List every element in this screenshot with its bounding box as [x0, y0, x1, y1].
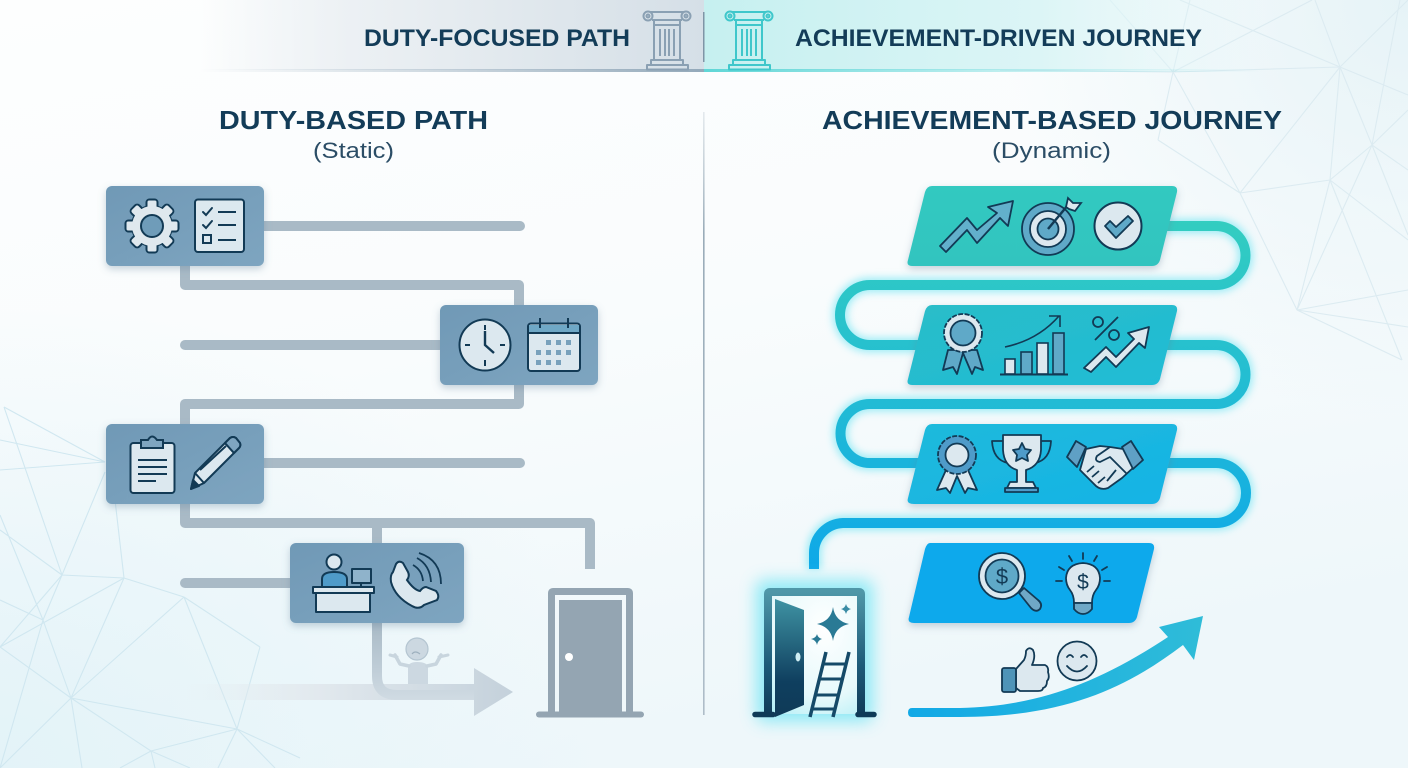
header label: achievement-driven journey: ACHIEVEMENT-DRIVEN JOURNEY	[795, 25, 1202, 52]
icon: gear	[126, 200, 178, 252]
icon: target	[1022, 198, 1081, 255]
icon: magnifier dollar	[979, 553, 1041, 611]
icon: grey pillar	[644, 12, 690, 70]
header label: duty-focused path: DUTY-FOCUSED PATH	[364, 25, 630, 52]
panel: gear and checklist	[106, 186, 264, 266]
panel: desk and phone	[290, 543, 464, 623]
header banner	[200, 0, 1264, 72]
icon: trophy	[992, 435, 1051, 492]
icon: percent growth arrow	[1084, 317, 1149, 372]
icon: open door with ladder	[755, 580, 874, 722]
heading: achievement-based journey: ACHIEVEMENT-BASED JOURNEY	[822, 107, 1282, 135]
icon: award rosette	[943, 314, 983, 374]
heading: duty-based path: (Static)	[313, 138, 394, 163]
icon: calendar	[528, 318, 580, 371]
icon: pencil	[191, 437, 240, 489]
heading: duty-based path	[219, 107, 488, 163]
panel: journey path glow	[814, 226, 1246, 569]
icon: lightbulb dollar: $	[1077, 571, 1089, 594]
panel: growth target check	[908, 186, 1177, 266]
icon: ribbon badge	[937, 436, 977, 493]
icon: phone with signal	[391, 553, 441, 608]
header divider	[703, 12, 704, 62]
arrow: flat duty arrow	[186, 620, 513, 716]
panel: journey path	[814, 226, 1246, 569]
center divider	[703, 112, 705, 715]
icon: checklist	[195, 200, 244, 252]
panel: duty path connectors	[185, 226, 590, 583]
icon: handshake	[1067, 441, 1143, 489]
icon: magnifier dollar: $	[996, 564, 1008, 589]
icon: shrugging person	[390, 638, 448, 684]
icon: lightbulb dollar	[1056, 553, 1110, 614]
arrow: rising journey arrow	[908, 616, 1203, 717]
panel: magnifier and bulb	[909, 543, 1154, 623]
icon: trend arrow	[940, 201, 1013, 252]
panel: clipboard and pencil	[106, 424, 264, 504]
icon: thumbs up	[1002, 648, 1049, 692]
panel: clock and calendar	[440, 305, 598, 385]
heading: achievement-based journey: (Dynamic)	[992, 138, 1111, 163]
icon: check badge	[1094, 202, 1142, 250]
panel: ribbon trophy handshake	[908, 424, 1177, 504]
panel: award chart percent	[908, 305, 1177, 385]
heading: achievement-based journey	[822, 107, 1282, 163]
icon: bar chart	[1000, 316, 1068, 374]
icon: teal pillar	[726, 12, 772, 70]
icon: clock	[460, 320, 510, 370]
icon: smiley	[1058, 642, 1096, 680]
icon: closed grey door	[536, 592, 644, 718]
icon: receptionist at desk	[313, 554, 374, 612]
icon: clipboard	[130, 436, 174, 493]
heading: duty-based path: DUTY-BASED PATH	[219, 107, 488, 135]
